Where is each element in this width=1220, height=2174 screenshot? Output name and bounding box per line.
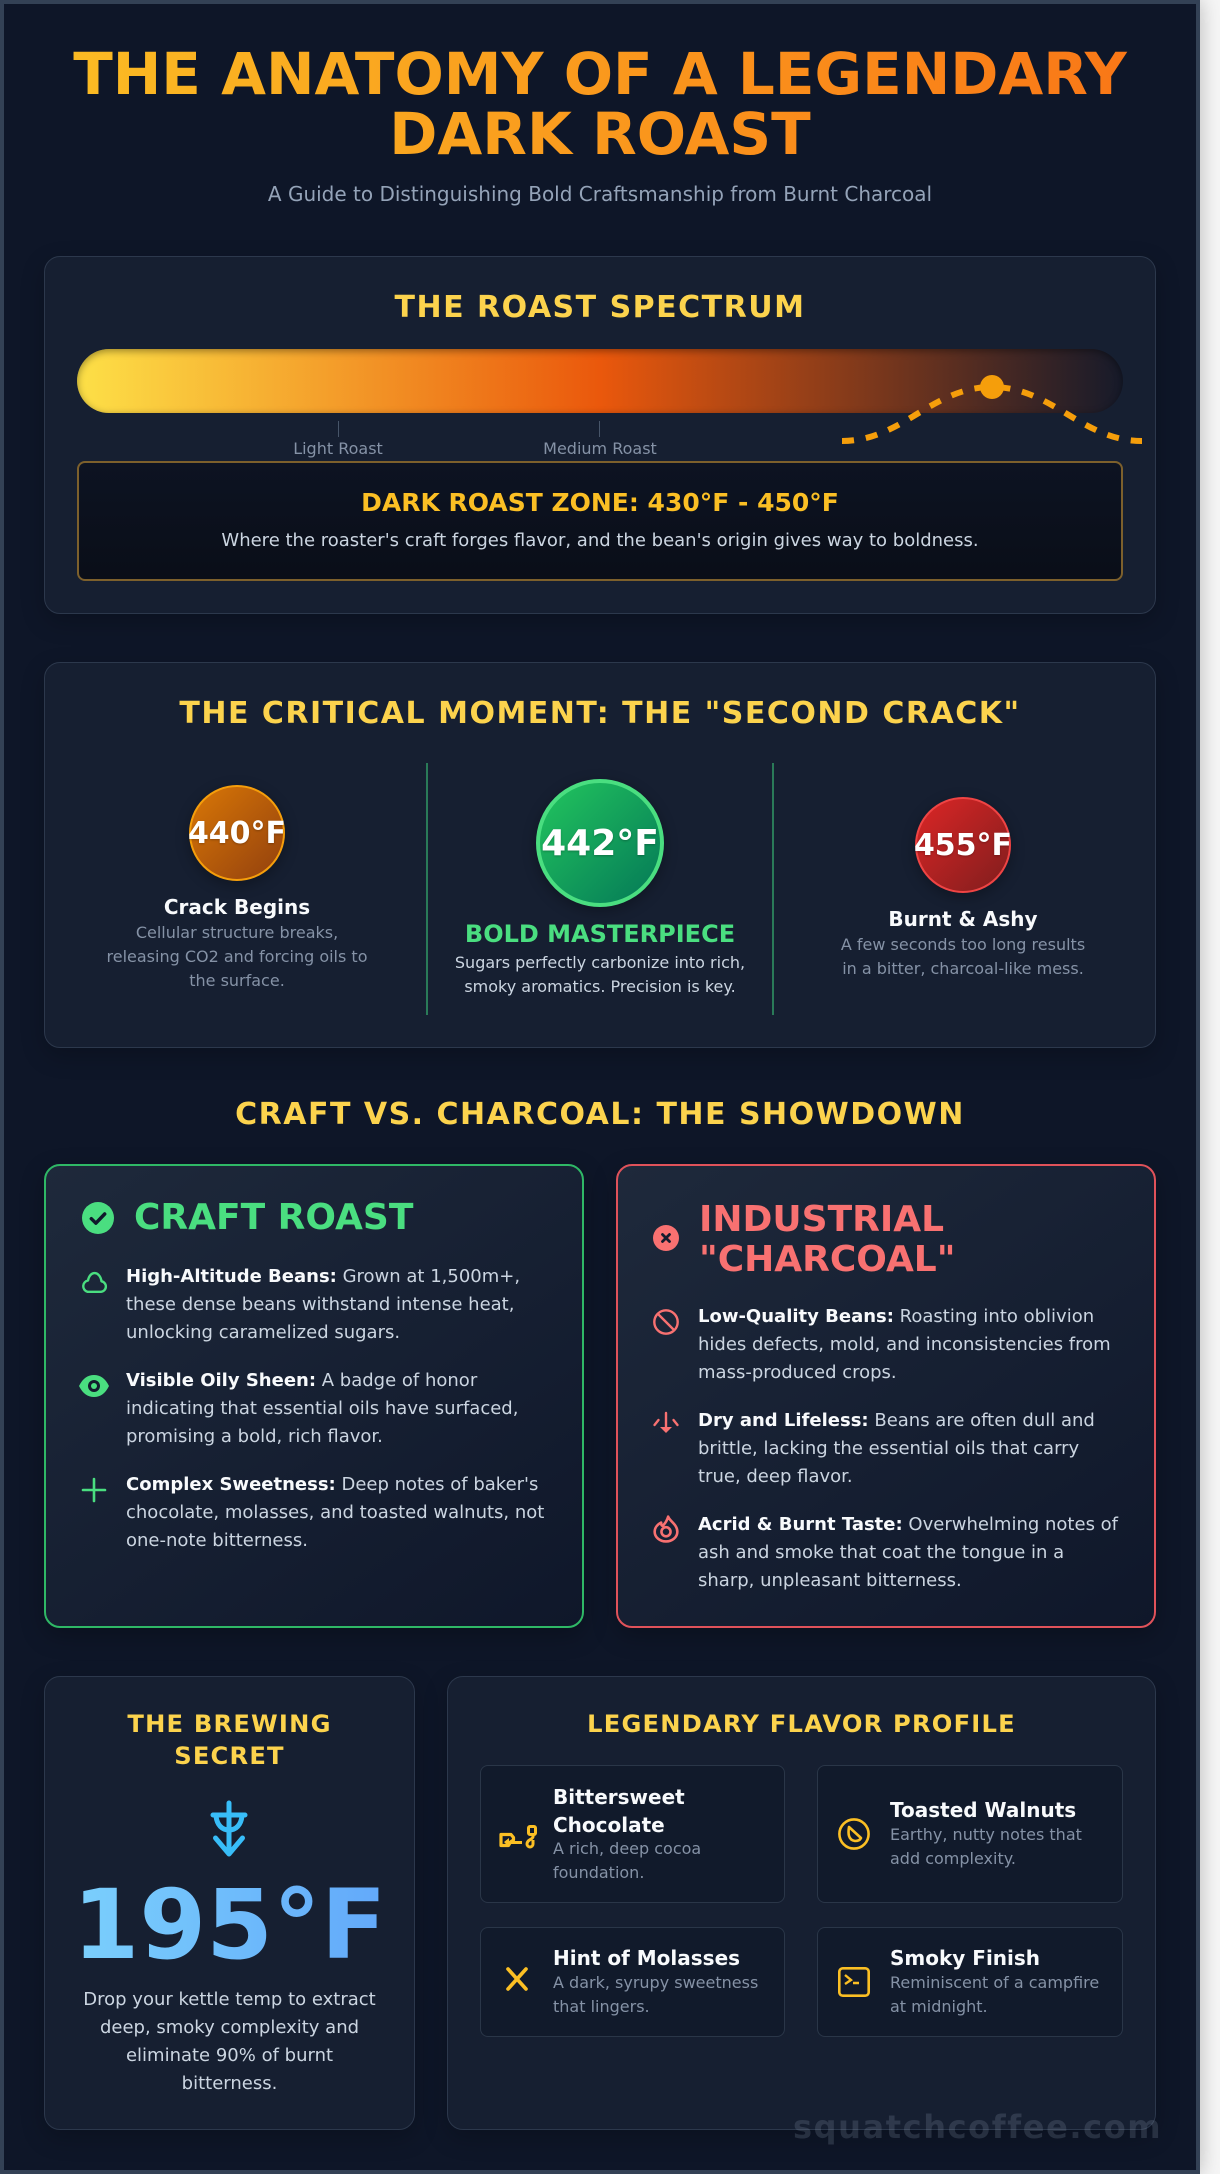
card: bittersweet chocolate bbox=[480, 1765, 785, 1903]
brewing text: bitterness. bbox=[182, 2073, 277, 2094]
flavor text: toasted walnuts: add complexity. bbox=[890, 1849, 1016, 1868]
stage: burnt and ashy title: Burnt & Ashy bbox=[888, 907, 1038, 931]
heading: brewing secret: THE BREWING bbox=[127, 1710, 332, 1738]
flavor text: smoky finish: Reminiscent of a campfire bbox=[890, 1973, 1099, 1992]
big temperature: 195F: 195°F bbox=[73, 1869, 386, 1981]
icon: x circle bbox=[653, 1225, 679, 1251]
stage: burnt and ashy text: in a bitter, charcoal-like mess. bbox=[842, 959, 1084, 978]
item: visible oily sheen: promising a bold, rich flavor. bbox=[126, 1426, 383, 1447]
stage: 442F circle bbox=[536, 779, 664, 907]
divider right bbox=[772, 763, 774, 1015]
item: complex sweetness: Complex Sweetness: Deep notes of baker's bbox=[126, 1474, 538, 1495]
item: dry and lifeless bbox=[698, 1410, 1095, 1487]
flavor text: bittersweet chocolate: foundation. bbox=[553, 1863, 644, 1882]
stage: crack begins title: Crack Begins bbox=[164, 895, 310, 919]
stage: crack begins text: releasing CO2 and forcing oils to bbox=[106, 947, 367, 966]
callout: dark roast zone bbox=[77, 461, 1123, 581]
brewing text: deep, smoky complexity and bbox=[100, 2017, 359, 2038]
item: high-altitude beans: unlocking caramelized sugars. bbox=[126, 1322, 400, 1343]
item: acrid and burnt taste: ash and smoke that coat the tongue in a bbox=[698, 1542, 1064, 1563]
item: high-altitude beans: High-Altitude Beans: Grown at 1,500m+, bbox=[126, 1266, 520, 1287]
icon: ban bbox=[653, 1309, 679, 1335]
title: DARK ROAST bbox=[389, 100, 811, 168]
item: complex sweetness bbox=[126, 1474, 544, 1551]
heading: second crack: THE CRITICAL MOMENT: THE "SECOND CRACK" bbox=[179, 696, 1021, 731]
icon: chocolate bbox=[499, 1825, 537, 1848]
stage: bold masterpiece text: smoky aromatics. Precision is key. bbox=[464, 977, 736, 996]
item: low-quality beans bbox=[698, 1306, 1111, 1383]
item: dry and lifeless: brittle, lacking the essential oils that carry bbox=[698, 1438, 1079, 1459]
flavor text: smoky finish: at midnight. bbox=[890, 1997, 988, 2016]
stage: burnt and ashy text: A few seconds too long results bbox=[841, 935, 1085, 954]
watermark: squatchcoffee.com bbox=[793, 2108, 1162, 2146]
flavor text: hint of molasses bbox=[553, 1973, 758, 2016]
icon: plus bbox=[82, 1478, 106, 1502]
flavor text: smoky finish bbox=[890, 1973, 1099, 2016]
stage: 440F circle: 440°F bbox=[188, 816, 286, 850]
item: high-altitude beans bbox=[126, 1266, 520, 1343]
icon: molasses x bbox=[506, 1967, 528, 1991]
flavor title: smoky finish: Smoky Finish bbox=[890, 1946, 1040, 1970]
stage: 440F circle bbox=[189, 785, 285, 881]
item: low-quality beans: Low-Quality Beans: Roasting into oblivion bbox=[698, 1306, 1094, 1327]
panel: industrial charcoal bbox=[616, 1164, 1156, 1628]
panel: brewing secret bbox=[44, 1676, 415, 2130]
heading: showdown: CRAFT VS. CHARCOAL: THE SHOWDOWN bbox=[235, 1097, 965, 1132]
item: acrid and burnt taste: sharp, unpleasant bitterness. bbox=[698, 1570, 962, 1591]
flavor title: toasted walnuts: Toasted Walnuts bbox=[890, 1798, 1076, 1822]
flavor text: toasted walnuts: Earthy, nutty notes that bbox=[890, 1825, 1082, 1844]
icon: terminal smoke bbox=[838, 1967, 870, 1997]
icon: flame bbox=[653, 1515, 679, 1543]
stage: bold masterpiece text bbox=[455, 953, 745, 996]
card: hint of molasses bbox=[480, 1927, 785, 2037]
tick: light roast bbox=[338, 421, 339, 437]
flavor title: bittersweet chocolate: Bittersweet bbox=[553, 1785, 685, 1809]
card: smoky finish bbox=[817, 1927, 1123, 2037]
spectrum bar bbox=[77, 349, 1123, 413]
item: visible oily sheen: Visible Oily Sheen: A badge of honor bbox=[126, 1370, 477, 1391]
panel: flavor profile bbox=[447, 1676, 1156, 2130]
icon: kettle anchor bbox=[210, 1800, 248, 1856]
flavor text: hint of molasses: A dark, syrupy sweetness bbox=[553, 1973, 758, 1992]
dark roast curve and marker bbox=[842, 375, 1142, 444]
stage: 442F circle: 442°F bbox=[541, 822, 659, 864]
item: low-quality beans: hides defects, mold, and inconsistencies from bbox=[698, 1334, 1111, 1355]
heading: the roast spectrum: THE ROAST SPECTRUM bbox=[395, 290, 805, 325]
item: low-quality beans: mass-produced crops. bbox=[698, 1362, 897, 1383]
icon: dry crack bbox=[653, 1412, 679, 1433]
item: visible oily sheen: indicating that essential oils have surfaced, bbox=[126, 1398, 518, 1419]
heading: industrial charcoal: INDUSTRIAL bbox=[699, 1199, 944, 1240]
stage: 455F circle bbox=[915, 797, 1011, 893]
stage: crack begins text: the surface. bbox=[189, 971, 285, 990]
callout heading: DARK ROAST ZONE: 430°F - 450°F bbox=[361, 488, 839, 517]
panel: craft roast bbox=[44, 1164, 584, 1628]
tick: medium roast bbox=[599, 421, 600, 437]
item: acrid and burnt taste bbox=[698, 1514, 1118, 1591]
item: dry and lifeless: Dry and Lifeless: Beans are often dull and bbox=[698, 1410, 1095, 1431]
item: dry and lifeless: true, deep flavor. bbox=[698, 1466, 853, 1487]
divider left bbox=[426, 763, 428, 1015]
brewing text: Drop your kettle temp to extract bbox=[83, 1989, 376, 2010]
flavor text: bittersweet chocolate bbox=[553, 1839, 701, 1882]
label: medium roast: Medium Roast bbox=[543, 439, 657, 458]
heading: brewing secret bbox=[127, 1710, 332, 1770]
stage: bold masterpiece text: Sugars perfectly carbonize into rich, bbox=[455, 953, 745, 972]
heading: flavor profile: LEGENDARY FLAVOR PROFILE bbox=[587, 1710, 1016, 1738]
brewing text: eliminate 90% of burnt bbox=[126, 2045, 333, 2066]
stage: burnt and ashy text bbox=[841, 935, 1085, 978]
item: complex sweetness: one-note bitterness. bbox=[126, 1530, 308, 1551]
flavor text: toasted walnuts bbox=[890, 1825, 1082, 1868]
flavor text: bittersweet chocolate: A rich, deep cocoa bbox=[553, 1839, 701, 1858]
heading: brewing secret: SECRET bbox=[174, 1742, 285, 1770]
stage: crack begins text: Cellular structure breaks, bbox=[136, 923, 338, 942]
card: toasted walnuts bbox=[817, 1765, 1123, 1903]
flavor title: bittersweet chocolate bbox=[553, 1785, 685, 1837]
flavor title: hint of molasses: Hint of Molasses bbox=[553, 1946, 740, 1970]
flavor text: hint of molasses: that lingers. bbox=[553, 1997, 650, 2016]
item: acrid and burnt taste: Acrid & Burnt Taste: Overwhelming notes of bbox=[698, 1514, 1118, 1535]
icon: eye bbox=[79, 1375, 109, 1397]
heading: industrial charcoal: "CHARCOAL" bbox=[699, 1239, 956, 1280]
title: THE ANATOMY OF A LEGENDARY bbox=[73, 40, 1127, 108]
brewing text bbox=[83, 1989, 376, 2094]
icon: check circle bbox=[82, 1202, 114, 1234]
panel: second crack bbox=[44, 662, 1156, 1048]
stage: bold masterpiece title: BOLD MASTERPIECE bbox=[465, 920, 735, 948]
icon: walnut bbox=[838, 1818, 870, 1850]
item: high-altitude beans: these dense beans withstand intense heat, bbox=[126, 1294, 514, 1315]
callout text: Where the roaster's craft forges flavor, and the bean's origin gives way to boldness. bbox=[221, 530, 979, 551]
stage: 455F circle: 455°F bbox=[914, 828, 1012, 862]
label: light roast: Light Roast bbox=[293, 439, 383, 458]
item: visible oily sheen bbox=[126, 1370, 518, 1447]
subtitle: A Guide to Distinguishing Bold Craftsmanship from Burnt Charcoal bbox=[268, 182, 932, 206]
stage: crack begins text bbox=[106, 923, 367, 990]
title bbox=[4, 44, 1196, 164]
heading: industrial charcoal bbox=[699, 1199, 956, 1280]
heading: craft roast: CRAFT ROAST bbox=[134, 1197, 413, 1238]
flavor title: bittersweet chocolate: Chocolate bbox=[553, 1813, 665, 1837]
panel: roast spectrum bbox=[44, 256, 1156, 614]
icon: cloud bbox=[82, 1272, 108, 1293]
item: complex sweetness: chocolate, molasses, and toasted walnuts, not bbox=[126, 1502, 544, 1523]
